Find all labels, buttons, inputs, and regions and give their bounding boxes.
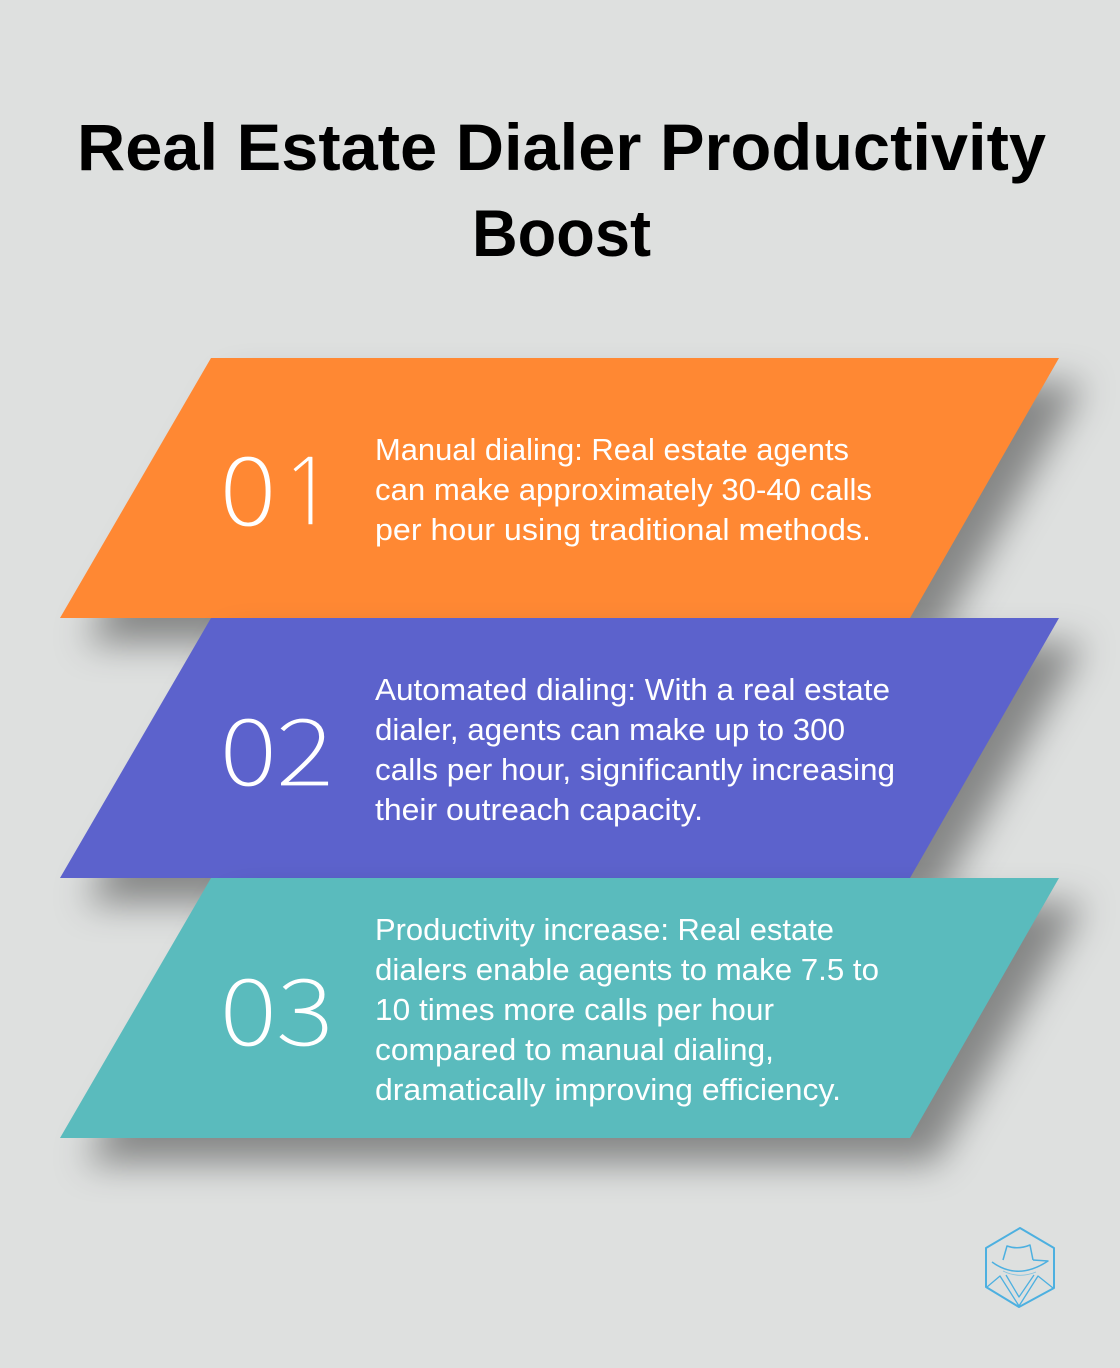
panel: step 03 productivity increase: 03 (220, 939, 333, 1072)
panel: step 02 automated dialing: their outreach capacity. (375, 792, 703, 827)
panel: step 02 automated dialing: 02 (220, 679, 333, 812)
panel: step 03 productivity increase: 10 times more calls per hour (375, 992, 774, 1027)
panel: step 02 automated dialing (60, 618, 1084, 903)
panel: step 01 manual dialing: 1 (279, 445, 336, 539)
panel: step 01 manual dialing: can make approximately 30-40 calls (375, 472, 872, 507)
panel: step 01 manual dialing (60, 358, 1084, 643)
panel: step 01 manual dialing: Manual dialing: Real estate agents (375, 432, 849, 467)
panel: step 03 productivity increase: dialers enable agents to make 7.5 to (375, 952, 879, 987)
panel: step 03 productivity increase: Productivity increase: Real estate (375, 912, 834, 947)
panel: step 03 productivity increase (60, 878, 1084, 1163)
panel: step 03 productivity increase: compared to manual dialing, (375, 1032, 774, 1067)
panel: step 02 automated dialing: Automated dialing: With a real estate (375, 672, 890, 707)
title: Real Estate Dialer Productivity (77, 110, 1046, 184)
panel: step 01 manual dialing: 0 (220, 419, 276, 552)
icon: spy hat logo in hexagon (986, 1228, 1054, 1307)
panel: step 02 automated dialing: dialer, agents can make up to 300 (375, 712, 845, 747)
panel: step 03 productivity increase: dramatically improving efficiency. (375, 1072, 841, 1107)
panel: step 01 manual dialing: per hour using traditional methods. (375, 512, 871, 547)
panel: step 02 automated dialing: calls per hour, significantly increasing (375, 752, 895, 787)
title: Boost (472, 196, 651, 270)
title (77, 110, 1046, 270)
